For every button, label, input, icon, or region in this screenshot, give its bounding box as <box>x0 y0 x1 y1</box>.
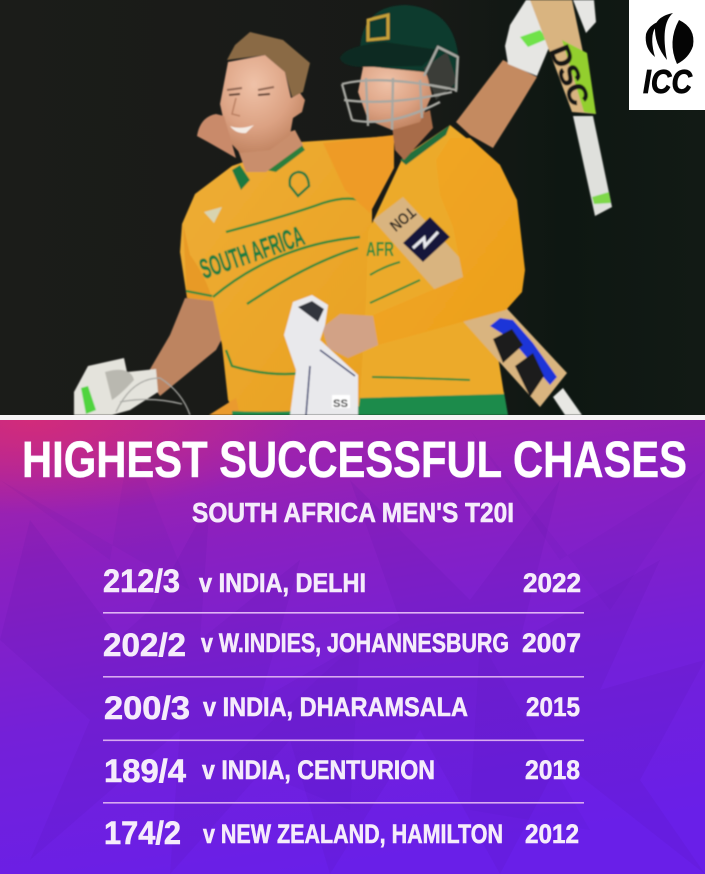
batting gloves at waist <box>284 295 358 415</box>
row: 202/2 v W.Indies, Johannesburg 2007: v W.INDIES, JOHANNESBURG <box>201 628 509 658</box>
ICC logo <box>629 0 705 110</box>
row: 202/2 v W.Indies, Johannesburg 2007: 202/2 <box>103 627 186 663</box>
left player glove <box>74 358 190 415</box>
row: 189/4 v India, Centurion 2018: 2018 <box>525 755 580 785</box>
subtitle: SOUTH AFRICA MEN'S T20I <box>192 497 514 528</box>
right player hand <box>322 314 378 358</box>
jersey lettering: SOUTH AFRICA <box>196 220 308 285</box>
right player shorts <box>358 392 508 415</box>
row: 174/2 v New Zealand, Hamilton 2012: v NEW ZEALAND, HAMILTON <box>203 819 503 849</box>
row: 189/4 v India, Centurion 2018 <box>106 758 580 784</box>
stats panel <box>0 420 705 874</box>
row: 202/2 v W.Indies, Johannesburg 2007 <box>104 632 580 657</box>
row: 174/2 v New Zealand, Hamilton 2012: 174/2 <box>104 815 181 851</box>
row: 200/3 v India, Dharamsala 2015: 200/3 <box>104 690 190 726</box>
row: 189/4 v India, Centurion 2018: 189/4 <box>104 753 186 789</box>
bat under arm <box>373 197 582 415</box>
row: 200/3 v India, Dharamsala 2015 <box>104 695 580 720</box>
icon: ICC ball emblem <box>646 13 693 64</box>
row: 189/4 v India, Centurion 2018: v INDIA, CENTURION <box>202 755 435 785</box>
right player neck and chin <box>392 110 433 160</box>
hand on shoulder <box>197 114 236 158</box>
raised bat: DSC <box>543 41 595 110</box>
right player arm around shoulder <box>323 135 394 213</box>
row: 212/3 v India, Delhi 2022 <box>104 568 580 596</box>
left player jersey <box>180 136 392 415</box>
right player face <box>358 62 432 130</box>
logo wordmark: ICC <box>643 63 693 100</box>
right player torso <box>360 125 504 398</box>
photo: two South Africa cricketers celebrating: AFR <box>366 239 394 261</box>
white divider band <box>0 415 705 420</box>
row: 200/3 v India, Dharamsala 2015: v INDIA, DHARAMSALA <box>203 692 468 722</box>
left player face <box>220 55 305 153</box>
row: 202/2 v W.Indies, Johannesburg 2007: 2007 <box>522 628 581 658</box>
photo: two South Africa cricketers celebrating <box>0 0 705 415</box>
row: 212/3 v India, Delhi 2022: 212/3 <box>103 563 180 599</box>
left player hair <box>227 32 310 97</box>
row: 212/3 v India, Delhi 2022: 2022 <box>523 568 581 598</box>
bat under arm: TON <box>386 203 418 234</box>
row: 212/3 v India, Delhi 2022: v INDIA, DELHI <box>199 568 366 598</box>
helmet and grille <box>340 5 458 130</box>
batting gloves at waist: SS <box>333 398 348 410</box>
row: 174/2 v New Zealand, Hamilton 2012: 2012 <box>525 819 579 849</box>
raised gloves <box>505 0 596 76</box>
left player arm <box>146 298 224 396</box>
right player sleeve <box>426 137 526 330</box>
row: 200/3 v India, Dharamsala 2015: 2015 <box>526 692 580 722</box>
raised arm <box>456 60 537 148</box>
raised bat <box>530 0 612 216</box>
left player neck <box>238 130 303 172</box>
